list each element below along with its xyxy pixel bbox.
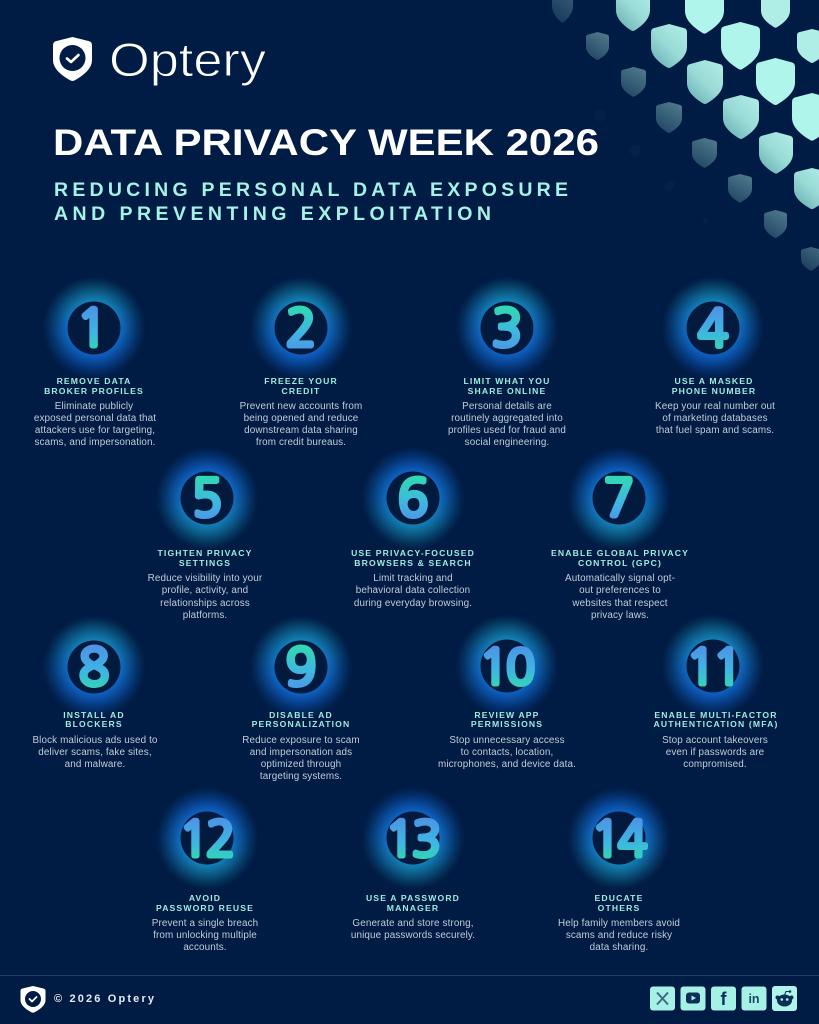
description 9: optimized through bbox=[261, 759, 341, 770]
number 1: 1 bbox=[77, 304, 107, 354]
number 9: 9 bbox=[286, 643, 316, 693]
copyright: © 2026 Optery bbox=[54, 993, 155, 1005]
description 1: attackers use for targeting, bbox=[35, 425, 155, 436]
heading 1: REMOVE DATA bbox=[57, 376, 131, 386]
description 14: Help family members avoid bbox=[558, 918, 680, 929]
description 9: Reduce exposure to scam bbox=[242, 735, 360, 746]
description 3: routinely aggregated into bbox=[451, 413, 563, 424]
icon: LinkedIn: in bbox=[748, 992, 760, 1006]
heading 3: LIMIT WHAT YOU bbox=[464, 376, 550, 386]
description 8: Block malicious ads used to bbox=[32, 735, 158, 746]
step 13 bbox=[351, 786, 475, 941]
description 5: platforms. bbox=[183, 610, 227, 621]
step 12 bbox=[152, 786, 259, 953]
number 3: 3 bbox=[492, 304, 522, 354]
title: DATA PRIVACY WEEK 2026 bbox=[53, 121, 599, 163]
heading 7: CONTROL (GPC) bbox=[578, 558, 662, 568]
description 7: privacy laws. bbox=[591, 610, 649, 621]
description 2: being opened and reduce bbox=[244, 413, 359, 424]
logo: Optery bbox=[53, 33, 267, 86]
step 6 bbox=[351, 446, 475, 609]
description 13: unique passwords securely. bbox=[351, 930, 475, 941]
step 10 bbox=[438, 614, 576, 770]
icon: Facebook: f bbox=[720, 989, 728, 1009]
heading 14: OTHERS bbox=[598, 903, 640, 913]
icon: Reddit bbox=[772, 986, 797, 1011]
number 6: 6 bbox=[398, 474, 428, 524]
heading 12: PASSWORD REUSE bbox=[156, 903, 254, 913]
description 3: profiles used for fraud and bbox=[448, 425, 566, 436]
icon: shield check bbox=[53, 37, 92, 81]
step 5 bbox=[148, 446, 263, 621]
heading 13: USE A PASSWORD bbox=[366, 893, 460, 903]
heading 2: CREDIT bbox=[282, 386, 320, 396]
social icons bbox=[650, 986, 797, 1011]
number 10: 10 bbox=[479, 643, 533, 691]
number 7: 7 bbox=[604, 474, 634, 524]
heading 11: AUTHENTICATION (MFA) bbox=[654, 719, 778, 729]
icon: Facebook bbox=[711, 986, 736, 1010]
shield pattern bbox=[552, 0, 819, 271]
heading 8: INSTALL AD bbox=[63, 710, 125, 720]
step 7 bbox=[551, 446, 689, 621]
step 4 bbox=[655, 276, 775, 436]
description 9: and impersonation ads bbox=[250, 747, 352, 758]
description 4: of marketing databases bbox=[662, 413, 768, 424]
description 6: during everyday browsing. bbox=[354, 598, 472, 609]
description 7: out preferences to bbox=[579, 585, 661, 596]
description 1: scams, and impersonation. bbox=[34, 437, 156, 448]
heading 3: SHARE ONLINE bbox=[468, 386, 546, 396]
number 13: 13 bbox=[385, 815, 439, 863]
heading 5: TIGHTEN PRIVACY bbox=[158, 548, 252, 558]
description 4: that fuel spam and scams. bbox=[656, 425, 774, 436]
number 4: 4 bbox=[698, 304, 728, 354]
number 11: 11 bbox=[686, 643, 740, 691]
heading 6: USE PRIVACY-FOCUSED bbox=[351, 548, 475, 558]
description 12: from unlocking multiple bbox=[153, 930, 257, 941]
heading 6: BROWSERS & SEARCH bbox=[354, 558, 472, 568]
icon: footer shield bbox=[20, 986, 46, 1013]
icon: YouTube bbox=[680, 986, 706, 1010]
description 2: from credit bureaus. bbox=[256, 437, 346, 448]
description 8: deliver scams, fake sites, bbox=[38, 747, 152, 758]
number 8: 8 bbox=[79, 643, 109, 693]
description 1: exposed personal data that bbox=[34, 413, 156, 424]
description 13: Generate and store strong, bbox=[352, 918, 474, 929]
description 2: downstream data sharing bbox=[244, 425, 358, 436]
heading 9: DISABLE AD bbox=[269, 710, 333, 720]
subtitle: AND PREVENTING EXPLOITATION bbox=[54, 203, 491, 225]
number 2: 2 bbox=[286, 304, 316, 354]
step 1 bbox=[34, 276, 156, 448]
step 8 bbox=[32, 615, 158, 770]
description 11: even if passwords are bbox=[666, 747, 765, 758]
step 14 bbox=[558, 786, 680, 953]
description 8: and malware. bbox=[65, 759, 125, 770]
heading 10: PERMISSIONS bbox=[471, 719, 543, 729]
description 5: relationships across bbox=[160, 598, 250, 609]
description 1: Eliminate publicly bbox=[55, 401, 133, 412]
heading 4: PHONE NUMBER bbox=[672, 386, 756, 396]
number 5: 5 bbox=[192, 474, 222, 524]
wordmark: Optery bbox=[109, 33, 267, 86]
subtitle bbox=[54, 179, 568, 225]
description 9: targeting systems. bbox=[260, 771, 342, 782]
heading 4: USE A MASKED bbox=[674, 376, 754, 386]
number 14: 14 bbox=[591, 815, 646, 863]
heading 9: PERSONALIZATION bbox=[252, 719, 350, 729]
heading 12: AVOID bbox=[189, 893, 221, 903]
description 11: Stop account takeovers bbox=[662, 735, 768, 746]
icon: LinkedIn bbox=[742, 986, 766, 1010]
description 12: Prevent a single breach bbox=[152, 918, 258, 929]
heading 1: BROKER PROFILES bbox=[44, 386, 144, 396]
description 2: Prevent new accounts from bbox=[240, 401, 362, 412]
description 10: Stop unnecessary access bbox=[449, 735, 565, 746]
heading 8: BLOCKERS bbox=[65, 719, 123, 729]
description 7: websites that respect bbox=[571, 598, 668, 609]
step 2 bbox=[240, 276, 362, 448]
description 6: Limit tracking and bbox=[373, 573, 453, 584]
number 12: 12 bbox=[179, 815, 233, 863]
description 10: microphones, and device data. bbox=[438, 759, 576, 770]
step 9 bbox=[242, 615, 360, 782]
heading 7: ENABLE GLOBAL PRIVACY bbox=[551, 548, 689, 558]
step 11 bbox=[654, 614, 778, 770]
description 5: Reduce visibility into your bbox=[148, 573, 263, 584]
heading 2: FREEZE YOUR bbox=[264, 376, 338, 386]
description 4: Keep your real number out bbox=[655, 401, 775, 412]
description 12: accounts. bbox=[183, 942, 227, 953]
description 6: behavioral data collection bbox=[356, 585, 470, 596]
subtitle: REDUCING PERSONAL DATA EXPOSURE bbox=[54, 179, 568, 201]
step 3 bbox=[448, 276, 566, 448]
heading 13: MANAGER bbox=[387, 903, 439, 913]
description 14: scams and reduce risky bbox=[566, 930, 672, 941]
description 14: data sharing. bbox=[590, 942, 648, 953]
heading 14: EDUCATE bbox=[595, 893, 643, 903]
description 10: to contacts, location, bbox=[461, 747, 553, 758]
description 3: Personal details are bbox=[462, 401, 552, 412]
heading 5: SETTINGS bbox=[179, 558, 231, 568]
description 11: compromised. bbox=[683, 759, 747, 770]
icon: X bbox=[650, 986, 675, 1010]
heading 10: REVIEW APP bbox=[474, 710, 540, 720]
description 7: Automatically signal opt- bbox=[565, 573, 675, 584]
description 5: profile, activity, and bbox=[162, 585, 248, 596]
description 3: social engineering. bbox=[465, 437, 549, 448]
footer brand bbox=[20, 986, 155, 1013]
heading 11: ENABLE MULTI-FACTOR bbox=[654, 710, 778, 720]
